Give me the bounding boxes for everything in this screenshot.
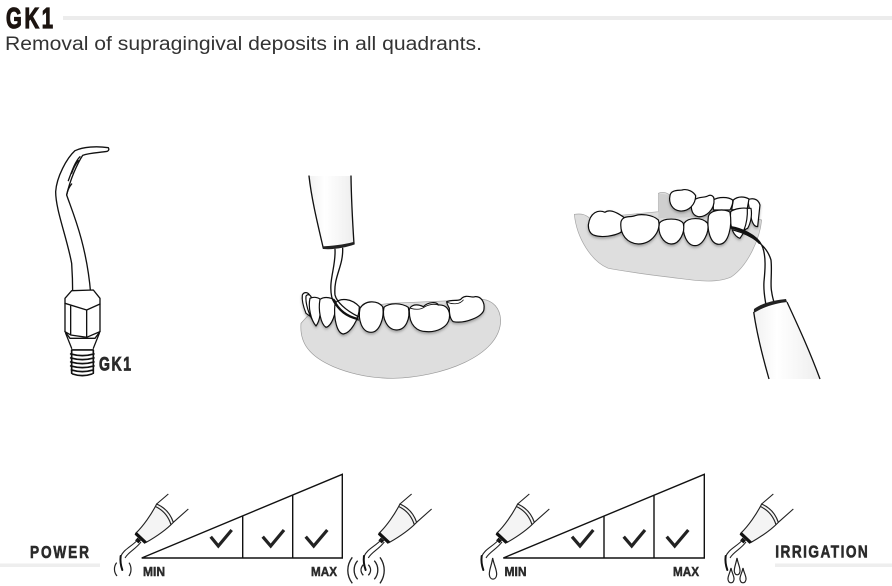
subtitle: Removal of supragingival deposits in all quadrants. — [5, 34, 482, 55]
scaler tip GK1 — [56, 147, 109, 376]
check marks — [211, 530, 327, 546]
scale labels: MIN — [143, 564, 165, 579]
power label: POWER — [30, 544, 91, 562]
icon: handpiece max irrigation — [725, 494, 793, 583]
scale labels: MIN — [504, 564, 526, 579]
scaler tip — [331, 248, 358, 320]
icon: handpiece min power — [114, 494, 188, 576]
icon: handpiece min irrigation — [481, 494, 549, 579]
teeth — [302, 293, 484, 334]
gum — [574, 192, 762, 281]
irrigation scale: MAX — [673, 564, 699, 579]
teeth — [588, 190, 760, 246]
gum — [301, 299, 501, 378]
title: GK1 — [6, 3, 56, 35]
irrigation label: IRRIGATION — [775, 543, 869, 562]
illustration: upper arch with scaler — [574, 190, 774, 305]
power scale: MAX — [311, 564, 337, 579]
handpiece — [309, 176, 354, 249]
check marks — [572, 530, 688, 546]
scaler tip — [731, 227, 774, 305]
handpiece — [754, 299, 820, 379]
icon: handpiece max power — [348, 494, 432, 583]
illustration: lower arch with scaler — [301, 176, 501, 378]
tip label: GK1 — [99, 353, 133, 375]
irrigation scale — [503, 474, 704, 579]
power scale — [142, 474, 342, 579]
